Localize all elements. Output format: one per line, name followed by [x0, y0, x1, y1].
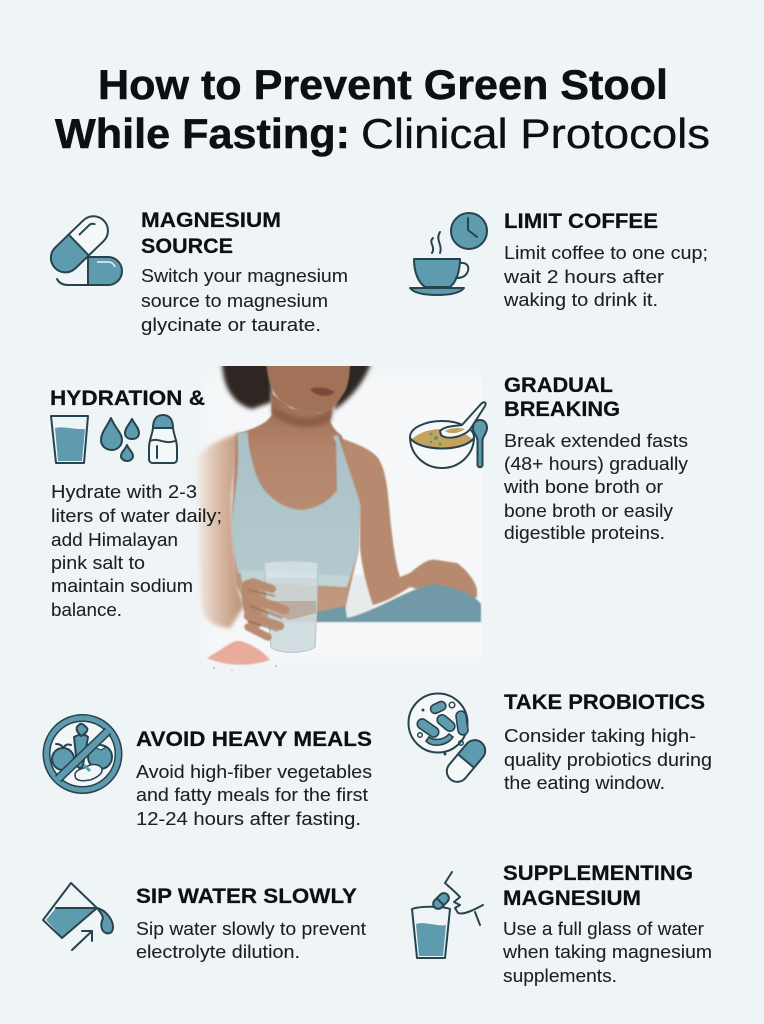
text block: wait 2 hours after: [503, 266, 664, 287]
heading: MAGNESIUM: [141, 209, 281, 232]
text block: when taking magnesium: [502, 941, 712, 962]
text block: digestible proteins.: [504, 522, 665, 543]
text block: [502, 918, 712, 986]
heading: GRADUAL: [504, 374, 613, 397]
text block: [503, 430, 689, 543]
text block: electrolyte dilution.: [136, 941, 300, 962]
heading: AVOID HEAVY MEALS: [136, 728, 372, 751]
text block: balance.: [51, 599, 122, 620]
text block: glycinate or taurate.: [141, 314, 321, 335]
icon: bacteria and capsule: [408, 694, 489, 786]
text block: liters of water daily;: [51, 505, 222, 526]
heading: TAKE PROBIOTICS: [504, 691, 705, 714]
text block: (48+ hours) gradually: [504, 453, 689, 474]
text block: with bone broth or: [503, 476, 663, 497]
salt pile: [207, 641, 277, 671]
title: How to Prevent Green Stool: [98, 61, 668, 108]
title: [55, 61, 710, 157]
text block: and fatty meals for the first: [136, 784, 368, 805]
hair: [222, 360, 372, 411]
text block: maintain sodium: [51, 575, 193, 596]
text block: 12-24 hours after fasting.: [136, 808, 361, 829]
panel: hydration: [50, 387, 222, 620]
text block: [136, 918, 366, 962]
panel: take probiotics: [408, 691, 712, 793]
icon: salt shaker: [149, 415, 177, 463]
hand on glass: [242, 579, 285, 637]
text block: waking to drink it.: [503, 289, 658, 310]
heading: SOURCE: [141, 235, 233, 258]
text block: [504, 725, 712, 793]
heading: [503, 862, 693, 910]
face: [266, 360, 350, 413]
title: Clinical Protocols: [361, 110, 710, 157]
text block: Hydrate with 2-3: [51, 481, 197, 502]
text block: source to magnesium: [141, 290, 328, 311]
text block: Break extended fasts: [504, 430, 688, 451]
leggings: [317, 584, 481, 622]
heading: SUPPLEMENTING: [503, 862, 693, 885]
text block: Limit coffee to one cup;: [504, 242, 708, 263]
icon: glass of water: [51, 416, 88, 463]
text block: quality probiotics during: [504, 749, 712, 770]
heading: [504, 374, 620, 421]
panel: gradual breaking: [410, 374, 689, 543]
text block: [141, 265, 348, 335]
heading: BREAKING: [504, 398, 620, 421]
text block: supplements.: [503, 965, 617, 986]
title: While Fasting:: [55, 110, 350, 157]
icon: prohibited foods: [46, 718, 118, 790]
text block: [136, 761, 372, 829]
panel: limit coffee: [410, 210, 708, 310]
text block: Sip water slowly to prevent: [136, 918, 366, 939]
panel: sip water slowly: [43, 883, 366, 962]
photo: woman holding a glass of water: [197, 360, 505, 671]
text block: the eating window.: [504, 772, 665, 793]
text block: Switch your magnesium: [141, 265, 348, 286]
icon: water drops: [101, 418, 139, 461]
heading: LIMIT COFFEE: [504, 210, 658, 233]
text block: pink salt to: [51, 552, 145, 573]
text block: Avoid high-fiber vegetables: [136, 761, 372, 782]
icon: glass, pill and face profile: [412, 872, 483, 958]
heading: HYDRATION &: [50, 387, 205, 410]
heading: SIP WATER SLOWLY: [136, 885, 357, 908]
heading: [141, 209, 281, 258]
right arm and hand: [340, 438, 477, 608]
icon: coffee cup and clock: [410, 213, 487, 295]
text block: [503, 242, 708, 310]
sports top: [232, 432, 360, 587]
icon: bowl of broth with spoon: [410, 402, 487, 468]
heading: MAGNESIUM: [503, 887, 641, 910]
text block: bone broth or easily: [504, 500, 674, 521]
icon: tilted glass pouring water: [43, 883, 113, 938]
text block: Consider taking high-: [504, 725, 696, 746]
left arm: [197, 433, 244, 628]
neck shadow: [272, 405, 333, 427]
text block: add Himalayan: [51, 529, 178, 550]
text block: [51, 481, 222, 620]
lips: [310, 387, 335, 396]
glass of water: [264, 561, 318, 652]
text block: Use a full glass of water: [503, 918, 704, 939]
panel: avoid heavy meals: [46, 718, 372, 829]
panel: supplementing magnesium: [412, 862, 712, 986]
icon: capsules: [45, 210, 122, 285]
arrow: [72, 931, 92, 950]
panel: magnesium source: [45, 209, 348, 335]
torso and neck: [232, 392, 360, 622]
